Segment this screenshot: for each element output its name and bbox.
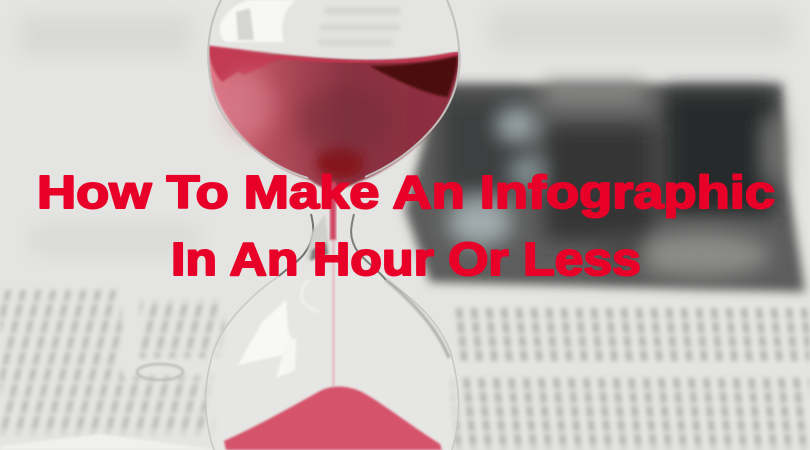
lower glass outline (206, 276, 459, 450)
hourglass (206, 0, 459, 450)
title line 1: How To Make An Infographic (37, 166, 775, 218)
lower glass bulb (206, 270, 459, 450)
upper glass outline (208, 0, 459, 178)
title line 2: In An Hour Or Less (171, 233, 641, 285)
dark glass edge (386, 280, 449, 358)
glass reflection: upper (220, 0, 400, 45)
upper glass bulb (208, 0, 459, 228)
glass neck (279, 182, 386, 386)
lower red sand pile (224, 387, 442, 450)
glass reflection: lower (238, 280, 320, 378)
blurred newspaper photograph (405, 82, 805, 292)
upper red sand (209, 46, 459, 189)
title (37, 166, 775, 285)
